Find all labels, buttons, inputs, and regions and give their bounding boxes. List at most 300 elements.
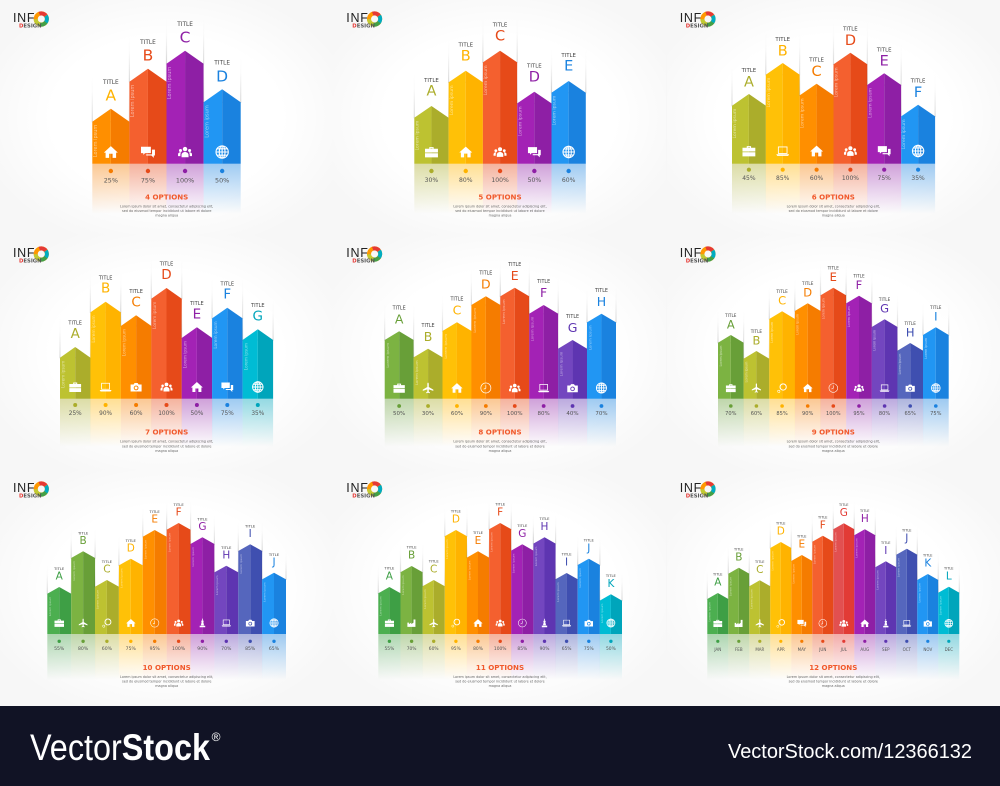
bar I: 65%: [562, 646, 571, 652]
icon: house: [104, 146, 118, 158]
bar B: TITLE: [774, 37, 791, 43]
icon: people: [160, 383, 172, 392]
caption: [453, 663, 547, 688]
bar I: TITLE: [880, 541, 891, 545]
caption: 11 OPTIONS: [476, 663, 524, 672]
bar K: K: [607, 578, 615, 590]
icon: people: [844, 146, 857, 156]
bar F: F: [820, 519, 826, 531]
icon: people: [839, 620, 848, 627]
bar D: Lorem ipsum: [152, 302, 157, 329]
bar H: TITLE: [539, 517, 550, 521]
bar E: E: [880, 54, 889, 70]
panel: 6 options: [680, 11, 935, 218]
bar C: C: [453, 302, 462, 318]
bar F: Lorem ipsum: [847, 306, 851, 327]
bar B: [90, 272, 121, 447]
logo: DESIGN: [686, 493, 708, 499]
bar G: Lorem ipsum: [243, 343, 248, 370]
bar E: TITLE: [560, 53, 577, 59]
icon: plane: [756, 619, 764, 627]
panel: 12 options: [680, 481, 959, 688]
icon: clock: [518, 619, 526, 627]
bar B: [744, 326, 769, 447]
bar A: [385, 303, 414, 447]
bar E: 100%: [507, 411, 523, 417]
bar D: Lorem ipsum: [472, 308, 477, 333]
bar B: B: [79, 535, 87, 547]
bar J: J: [271, 556, 276, 568]
bar H: Lorem ipsum: [588, 325, 592, 350]
icon: search: [777, 620, 785, 627]
bar E: TITLE: [827, 266, 839, 270]
bar H: [533, 514, 556, 680]
bar E: TITLE: [796, 535, 807, 539]
bar A: Lorem ipsum: [732, 108, 738, 139]
bar K: Lorem ipsum: [918, 583, 922, 602]
bar E: [791, 532, 812, 680]
bar J: Lorem ipsum: [263, 582, 267, 602]
bar F: TITLE: [852, 274, 865, 278]
icon: factory: [407, 620, 415, 627]
bar D: [795, 278, 821, 447]
logo: [346, 11, 382, 29]
bar J: TITLE: [268, 552, 280, 557]
icon: clock: [151, 619, 159, 627]
caption: [453, 428, 547, 453]
bar I: [556, 550, 578, 680]
logo: INF: [680, 246, 702, 260]
icon: laptop: [902, 620, 911, 627]
bar E: Lorem ipsum: [867, 87, 873, 118]
bar C: TITLE: [808, 58, 824, 64]
bar C: Lorem ipsum: [423, 589, 427, 609]
bar G: 80%: [879, 411, 890, 417]
bar A: A: [744, 74, 754, 90]
bar A: [732, 63, 766, 214]
bar A: Lorem ipsum: [48, 597, 52, 616]
bar F: F: [223, 287, 231, 303]
icon: chat: [797, 620, 806, 627]
bar B: 85%: [776, 175, 790, 182]
bar F: F: [914, 85, 922, 101]
bar C: C: [778, 294, 786, 308]
bar F: F: [540, 285, 547, 300]
bar K: NOV: [923, 647, 932, 652]
bar A: Lorem ipsum: [708, 602, 712, 621]
logo: INF: [13, 481, 35, 495]
caption: sed do eiusmod tempor incididunt ut labore et dolore: [789, 680, 878, 684]
bar H: Lorem ipsum: [855, 538, 859, 558]
caption: 9 OPTIONS: [812, 428, 855, 436]
bar E: [182, 297, 212, 447]
bar E: TITLE: [876, 47, 892, 53]
logo: [13, 246, 49, 264]
logo: INF: [13, 11, 35, 25]
bar I: Lorem ipsum: [556, 582, 560, 602]
footer id: VectorStock.com/12366132: [728, 741, 972, 763]
icon: house: [860, 620, 869, 627]
icon: clock: [481, 383, 491, 393]
bar F: Lorem ipsum: [901, 119, 907, 149]
bar B: 30%: [422, 411, 434, 417]
bar F: 75%: [221, 411, 234, 417]
icon: search: [778, 384, 786, 392]
bar K: [600, 571, 622, 680]
bar A: Lorem ipsum: [719, 346, 723, 366]
bar C: C: [495, 28, 505, 44]
icon: laptop: [538, 384, 549, 392]
bar D: Lorem ipsum: [771, 551, 775, 570]
icon: tower: [542, 619, 547, 627]
bar I: [923, 302, 949, 447]
logo: [680, 11, 716, 29]
bar B: Lorem ipsum: [401, 575, 405, 595]
bar D: [119, 536, 143, 680]
bar D: D: [452, 514, 460, 526]
logo: DESIGN: [352, 258, 375, 264]
panel: 10 options: [13, 481, 286, 688]
icon: people: [496, 620, 505, 626]
bar I: 85%: [245, 646, 256, 652]
bar A: TITLE: [724, 313, 737, 318]
bar F: TITLE: [172, 502, 184, 507]
bar I: I: [565, 557, 568, 569]
bar F: 80%: [538, 411, 550, 417]
bar C: TITLE: [754, 560, 765, 564]
caption: [120, 192, 213, 218]
bar D: TITLE: [213, 61, 230, 67]
bar C: TITLE: [128, 289, 143, 295]
icon: clock: [829, 384, 838, 392]
bar H: [897, 318, 923, 447]
bar D: [151, 258, 182, 447]
bar E: [820, 263, 846, 447]
bar D: TITLE: [125, 538, 137, 543]
bar B: Lorem ipsum: [72, 561, 76, 580]
bar A: [378, 564, 400, 680]
bar G: [833, 500, 854, 680]
bar E: 50%: [190, 411, 204, 417]
bar J: J: [586, 542, 590, 554]
bar F: Lorem ipsum: [813, 545, 817, 564]
bar H: 90%: [540, 646, 549, 652]
bar I: Lorem ipsum: [876, 570, 880, 590]
logo: [346, 481, 382, 499]
bar E: E: [830, 270, 837, 284]
logo: [680, 481, 716, 499]
icon: camera: [585, 620, 593, 626]
bar A: Lorem ipsum: [379, 596, 383, 616]
bar K: TITLE: [922, 554, 933, 558]
bar C: MAR: [755, 647, 765, 652]
bar E: Lorem ipsum: [552, 95, 558, 126]
icon: globe: [253, 382, 263, 392]
icon: laptop: [880, 385, 890, 392]
bar C: [769, 286, 795, 447]
bar B: 75%: [141, 176, 155, 184]
bar D: 90%: [480, 411, 492, 417]
bar D: D: [529, 69, 540, 85]
bar C: [483, 18, 517, 214]
bar G: [872, 294, 898, 447]
bar E: TITLE: [507, 262, 521, 268]
caption: 12 OPTIONS: [809, 663, 857, 672]
bar B: 90%: [99, 411, 113, 417]
bar E: 100%: [826, 411, 841, 417]
bar C: C: [103, 564, 111, 576]
bar G: 85%: [517, 646, 527, 652]
bar B: B: [735, 551, 742, 563]
bar G: 40%: [566, 411, 579, 417]
icon: people: [854, 384, 864, 392]
bar B: B: [752, 333, 760, 347]
bar I: Lorem ipsum: [239, 554, 243, 573]
bar J: Lorem ipsum: [578, 568, 582, 587]
bar B: TITLE: [406, 546, 417, 550]
caption: Lorem ipsum dolor sit amet, consectetur adipiscing elit,: [787, 440, 880, 444]
logo: INF: [13, 246, 35, 260]
bar B: B: [143, 47, 153, 65]
bar E: Lorem ipsum: [501, 299, 506, 324]
panel: 11 options: [346, 481, 622, 688]
caption: magna aliqua: [155, 449, 178, 453]
bar G: Lorem ipsum: [559, 351, 564, 376]
bar D: D: [127, 542, 135, 554]
bar E: TITLE: [189, 301, 204, 307]
bar D: [204, 56, 241, 214]
bar G: [243, 299, 273, 447]
bar D: Lorem ipsum: [204, 105, 210, 138]
bar E: E: [511, 268, 519, 283]
icon: globe: [931, 384, 940, 392]
icon: chat: [141, 147, 155, 158]
icon: tower: [883, 619, 888, 627]
icon: briefcase: [726, 384, 736, 392]
bar J: 65%: [269, 646, 280, 652]
bar C: [95, 557, 119, 680]
caption: magna aliqua: [155, 684, 178, 688]
bar D: Lorem ipsum: [120, 568, 124, 588]
bar L: TITLE: [943, 566, 954, 570]
bar D: [834, 22, 867, 214]
bar J: TITLE: [901, 528, 912, 532]
caption: sed do eiusmod tempor incididunt ut labore et dolore: [455, 444, 545, 448]
bar C: C: [131, 294, 141, 310]
bar E: E: [475, 535, 481, 547]
bar F: [529, 277, 558, 447]
bar H: TITLE: [220, 545, 232, 550]
bar E: 60%: [562, 177, 576, 184]
icon: briefcase: [425, 147, 438, 157]
bar H: H: [906, 325, 915, 339]
bar C: TITLE: [428, 560, 439, 564]
bar D: 100%: [842, 175, 859, 182]
bar I: I: [934, 310, 938, 324]
icon: plane: [423, 383, 433, 393]
bar A: Lorem ipsum: [61, 361, 66, 388]
bar J: [578, 536, 600, 680]
caption: sed do eiusmod tempor incididunt ut labore et dolore: [789, 444, 878, 448]
bar C: [121, 285, 151, 447]
bar G: G: [880, 302, 889, 316]
bar B: TITLE: [77, 530, 89, 536]
bar B: B: [101, 281, 110, 297]
bar K: 50%: [606, 646, 616, 652]
background glow: row 3: [0, 470, 1000, 705]
icon: camera: [924, 620, 932, 627]
icon: house: [451, 383, 463, 393]
bar I: I: [884, 545, 887, 557]
icon: camera: [131, 383, 142, 392]
bar C: 60%: [130, 411, 143, 417]
caption: Lorem ipsum dolor sit amet, consectetur adipiscing elit,: [453, 675, 547, 679]
bar A: A: [106, 87, 117, 105]
caption: [120, 428, 213, 453]
bar G: TITLE: [196, 516, 208, 522]
bar C: [749, 557, 770, 680]
logo: [346, 246, 382, 264]
bar E: [552, 48, 586, 214]
background glow: row 2: [0, 235, 1000, 470]
bar D: 100%: [158, 411, 175, 417]
registered mark: ®: [212, 730, 221, 744]
caption: Lorem ipsum dolor sit amet, consectetur adipiscing elit,: [120, 675, 213, 679]
bar E: TITLE: [472, 531, 484, 535]
bar K: TITLE: [605, 574, 617, 578]
bar G: 35%: [251, 411, 265, 417]
bar G: Lorem ipsum: [191, 547, 195, 566]
bar A: Lorem ipsum: [93, 125, 99, 157]
bar H: Lorem ipsum: [215, 575, 219, 595]
bar K: [917, 551, 938, 680]
bar C: 60%: [102, 646, 113, 652]
bar H: 65%: [905, 411, 916, 417]
logo: DESIGN: [686, 23, 708, 29]
bar C: TITLE: [775, 289, 788, 294]
bar H: H: [541, 521, 548, 533]
bar D: D: [845, 33, 856, 49]
caption: [120, 663, 213, 688]
icon: camera: [906, 385, 915, 392]
bar F: 100%: [172, 646, 186, 652]
bar L: L: [946, 570, 952, 582]
bar K: Lorem ipsum: [600, 604, 604, 623]
bar B: Lorem ipsum: [729, 577, 733, 596]
bar F: TITLE: [536, 279, 550, 285]
icon: people: [178, 147, 192, 157]
icon: people: [174, 619, 183, 627]
icon: laptop: [222, 620, 231, 627]
bar B: [766, 32, 800, 214]
caption: 10 OPTIONS: [143, 663, 191, 672]
bar A: A: [727, 317, 735, 331]
bar C: 60%: [429, 646, 439, 652]
bar C: Lorem ipsum: [443, 334, 448, 359]
bar F: [489, 500, 511, 680]
icon: people: [494, 147, 507, 157]
bar H: [854, 506, 875, 680]
bar B: 60%: [751, 411, 762, 417]
bar B: [71, 528, 95, 680]
caption: Lorem ipsum dolor sit amet, consectetur adipiscing elit,: [787, 204, 880, 208]
caption: magna aliqua: [822, 449, 845, 453]
bar D: D: [481, 276, 491, 292]
icon: globe: [912, 145, 924, 157]
bar D: TITLE: [775, 522, 786, 526]
caption: 5 OPTIONS: [478, 192, 522, 202]
bar F: Lorem ipsum: [530, 316, 535, 341]
bar B: Lorem ipsum: [766, 77, 772, 108]
bar F: TITLE: [494, 503, 506, 507]
bar E: E: [193, 306, 201, 322]
caption: Lorem ipsum dolor sit amet, consectetur adipiscing elit,: [120, 440, 213, 444]
icon: camera: [246, 620, 255, 627]
icon: globe: [945, 619, 953, 627]
bar F: Lorem ipsum: [167, 533, 171, 552]
icon: briefcase: [385, 620, 394, 627]
bar H: H: [222, 549, 230, 561]
bar D: [770, 519, 791, 680]
bar E: Lorem ipsum: [792, 564, 796, 583]
bar B: [129, 36, 166, 214]
bar A: 50%: [393, 411, 405, 417]
bar F: [167, 500, 191, 680]
bar F: F: [856, 278, 862, 292]
icon: search: [103, 619, 111, 627]
bar A: A: [71, 326, 81, 342]
panel: 4 options: [13, 11, 241, 218]
bar E: 80%: [473, 646, 483, 652]
icon: tower: [200, 619, 205, 627]
icon: house: [459, 147, 472, 157]
bar F: [212, 278, 243, 447]
bar A: TITLE: [392, 306, 406, 312]
caption: Lorem ipsum dolor sit amet, consectetur adipiscing elit,: [787, 675, 880, 679]
bar E: Lorem ipsum: [821, 298, 825, 319]
bar J: [262, 550, 286, 680]
bar A: [707, 570, 728, 680]
caption: 6 OPTIONS: [812, 192, 855, 202]
bar D: 90%: [802, 411, 814, 417]
bar G: TITLE: [838, 503, 849, 507]
caption: sed do eiusmod tempor incididunt ut labore et dolore: [122, 209, 211, 213]
bar H: 70%: [595, 411, 608, 417]
icon: camera: [567, 384, 578, 392]
bar C: C: [180, 29, 190, 47]
bar C: C: [756, 564, 763, 576]
bar C: 100%: [491, 177, 509, 184]
bar B: TITLE: [421, 323, 435, 329]
bar C: 60%: [810, 175, 824, 182]
bar C: [166, 18, 204, 214]
bar D: D: [161, 267, 172, 283]
bar A: A: [56, 571, 64, 583]
icon: globe: [216, 146, 228, 158]
caption: [787, 428, 880, 453]
bar B: Lorem ipsum: [91, 315, 96, 343]
bar A: TITLE: [67, 321, 82, 327]
bar D: Lorem ipsum: [834, 67, 840, 97]
bar C: TITLE: [449, 296, 463, 302]
bar C: Lorem ipsum: [122, 329, 127, 356]
bar C: [442, 294, 472, 447]
bar B: Lorem ipsum: [449, 85, 455, 115]
bar G: G: [518, 528, 526, 540]
bar C: Lorem ipsum: [750, 589, 754, 609]
bar B: [400, 543, 423, 680]
icon: globe: [607, 619, 615, 627]
